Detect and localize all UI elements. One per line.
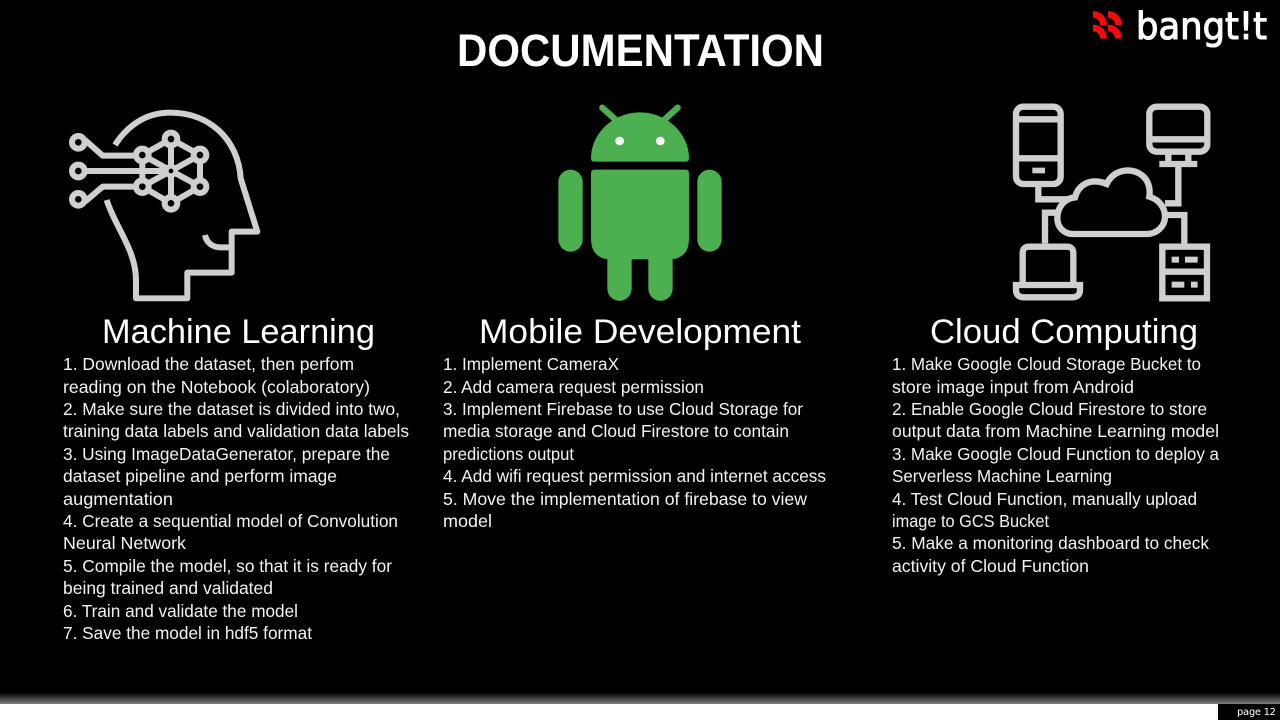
- text block: machine learning steps: 7. Save the model in hdf5 format: [63, 623, 312, 643]
- text block: mobile development steps: 2. Add camera request permission: [443, 377, 704, 397]
- text block: machine learning steps: 3. Using ImageDataGenerator, prepare the: [63, 444, 390, 464]
- text block: mobile development steps: [443, 354, 826, 531]
- text block: cloud computing steps: output data from Machine Learning model: [892, 421, 1219, 441]
- text block: machine learning steps: 6. Train and validate the model: [63, 601, 298, 621]
- text block: cloud computing steps: Serverless Machine Learning: [892, 466, 1112, 486]
- text block: machine learning steps: 4. Create a sequential model of Convolution: [63, 511, 398, 531]
- text block: machine learning steps: reading on the Notebook (colaboratory): [63, 377, 370, 397]
- icon: logo mark: [1093, 14, 1118, 38]
- text block: cloud computing steps: [892, 354, 1219, 576]
- text block: mobile development steps: 4. Add wifi request permission and internet access: [443, 466, 826, 486]
- text block: cloud computing steps: store image input from Android: [892, 377, 1134, 397]
- text block: mobile development steps: predictions output: [443, 444, 574, 464]
- text block: machine learning steps: 5. Compile the model, so that it is ready for: [63, 556, 392, 576]
- logo wordmark: bangt!t: [1136, 5, 1267, 48]
- text block: machine learning steps: being trained and validated: [63, 578, 273, 598]
- title: DOCUMENTATION: [457, 25, 824, 76]
- icon: AI head: [72, 113, 257, 298]
- text block: machine learning steps: 1. Download the dataset, then perfom: [63, 354, 354, 374]
- text block: mobile development steps: 3. Implement Firebase to use Cloud Storage for: [443, 399, 803, 419]
- text block: mobile development steps: model: [443, 511, 492, 531]
- text block: cloud computing steps: 2. Enable Google Cloud Firestore to store: [892, 399, 1207, 419]
- text block: machine learning steps: training data labels and validation data labels: [63, 421, 409, 441]
- text block: cloud computing steps: activity of Cloud Function: [892, 556, 1089, 576]
- text block: machine learning steps: [63, 354, 409, 643]
- logo: bangkit: [1093, 5, 1267, 48]
- text block: cloud computing steps: 1. Make Google Cloud Storage Bucket to: [892, 354, 1201, 374]
- text block: cloud computing steps: 3. Make Google Cloud Function to deploy a: [892, 444, 1219, 464]
- footer bar: [0, 693, 1280, 720]
- text block: machine learning steps: augmentation: [63, 489, 173, 509]
- heading: Mobile Development: Mobile Development: [479, 313, 802, 351]
- text block: cloud computing steps: image to GCS Bucket: [892, 511, 1049, 531]
- text block: machine learning steps: Neural Network: [63, 533, 186, 553]
- text block: cloud computing steps: 5. Make a monitoring dashboard to check: [892, 533, 1209, 553]
- heading: Cloud Computing: Cloud Computing: [930, 313, 1198, 351]
- text block: mobile development steps: 1. Implement CameraX: [443, 354, 619, 374]
- icon: cloud network: [1016, 107, 1207, 298]
- heading: Machine Learning: Machine Learning: [102, 313, 375, 351]
- icon: android robot: [558, 108, 722, 301]
- text block: machine learning steps: dataset pipeline and perform image: [63, 466, 337, 486]
- text block: mobile development steps: 5. Move the implementation of firebase to view: [443, 489, 807, 509]
- text block: mobile development steps: media storage and Cloud Firestore to contain: [443, 421, 789, 441]
- page number: page 12: [1237, 707, 1276, 718]
- text block: cloud computing steps: 4. Test Cloud Function, manually upload: [892, 489, 1197, 509]
- text block: machine learning steps: 2. Make sure the dataset is divided into two,: [63, 399, 400, 419]
